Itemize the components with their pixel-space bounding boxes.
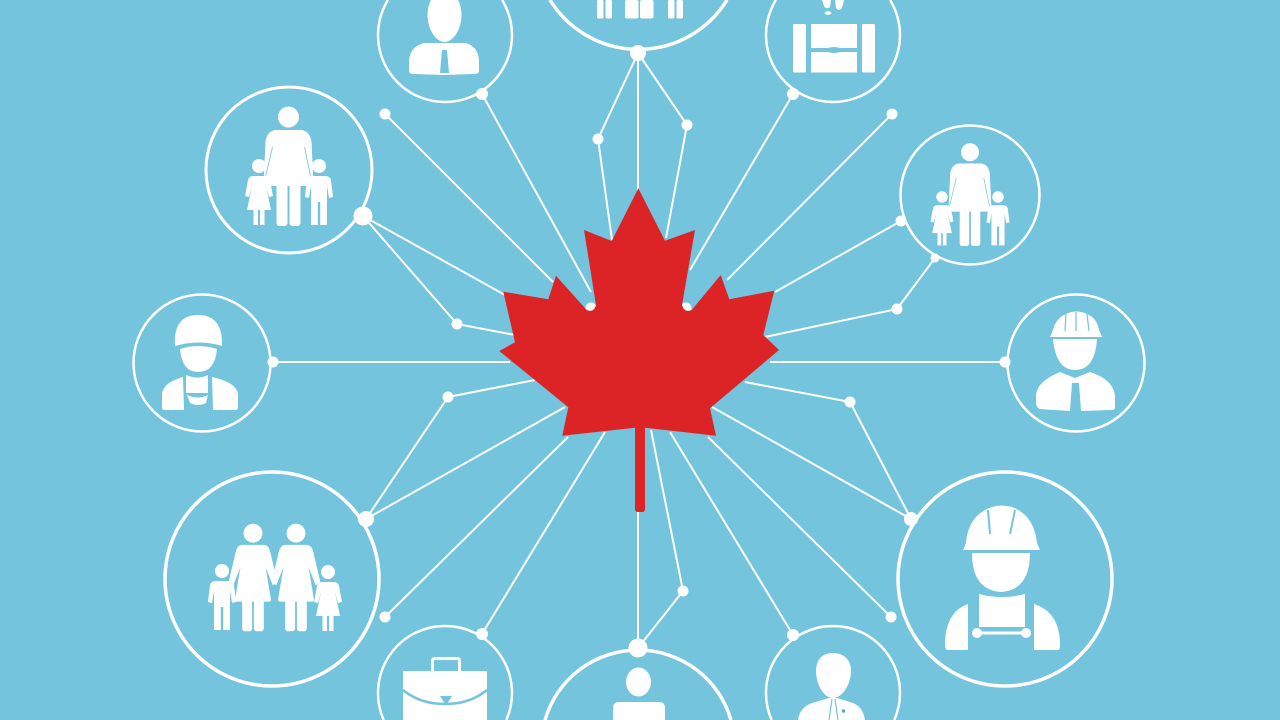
- icon circle: top-left businessman: [378, 0, 512, 102]
- icon circle: lower-left family: [165, 472, 379, 686]
- icon circle: right worker: [1008, 294, 1144, 432]
- maple leaf: [499, 188, 779, 512]
- icon circle: upper-right family: [900, 126, 1040, 264]
- connector nodes: [268, 45, 1010, 658]
- icon circle: top-center family: [550, 0, 727, 49]
- network connector lines: [273, 53, 1005, 648]
- icon circle: bottom-center person: [545, 650, 731, 720]
- icon circle: bottom-left briefcase: [378, 626, 512, 720]
- icon circle: upper-left family: [206, 87, 372, 253]
- icon circle: left worker: [134, 294, 270, 432]
- icon circle: top-right doctor with case: [766, 0, 900, 102]
- icon circle: bottom-right doctor: [766, 626, 900, 720]
- icon circle: lower-right worker: [898, 472, 1112, 686]
